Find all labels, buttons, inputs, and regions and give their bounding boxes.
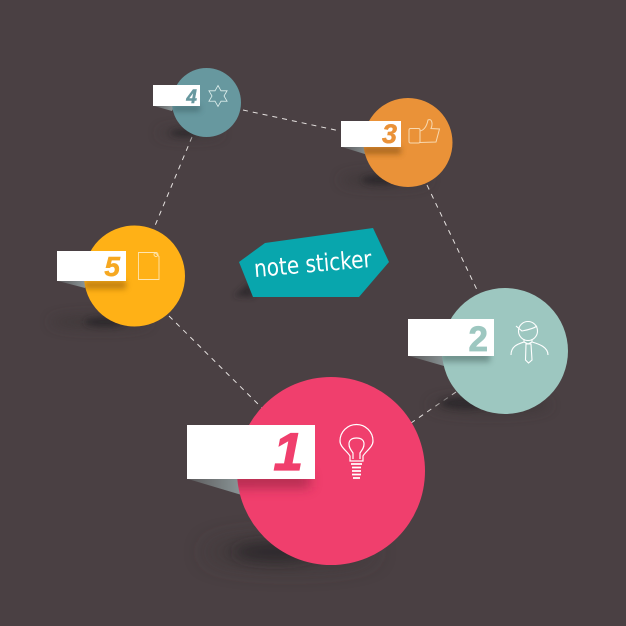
label 2: 2 [469, 320, 488, 359]
label shadow on circle 5 [84, 281, 126, 289]
label tail 4 [154, 106, 174, 111]
label tail 2 [409, 356, 450, 366]
label shadow on circle 1 [225, 474, 310, 487]
label tail 1 [188, 479, 245, 496]
circle 5 [84, 226, 185, 326]
circle 2 [442, 288, 568, 414]
label 2 [408, 319, 494, 359]
sticker shape [239, 228, 389, 297]
label 1 [187, 423, 315, 482]
sticker shadow [234, 282, 254, 297]
sticker text: note sticker [253, 245, 373, 283]
icon: thumbs up [409, 120, 440, 143]
icon: person with tie [511, 322, 548, 363]
label 5: 5 [104, 251, 120, 282]
label shadow on circle 4 [172, 106, 200, 111]
label tail 3 [342, 147, 372, 155]
label tail 5 [58, 281, 88, 288]
circle 1 [237, 377, 425, 565]
ground shadow 5 [50, 315, 150, 329]
label 3: 3 [382, 119, 397, 149]
label 4: 4 [185, 87, 197, 108]
ground shadow 3 [340, 173, 430, 187]
circle 5 group [50, 226, 185, 329]
ground shadow 2 [430, 396, 550, 414]
ground shadow 1 [205, 538, 375, 566]
label shadow on circle 3 [362, 147, 401, 154]
icon: light bulb [340, 425, 373, 478]
circle 4 [172, 68, 241, 137]
dashed connector lines [154, 110, 478, 423]
note sticker [234, 228, 389, 297]
circle 3 group [340, 98, 452, 187]
icon: document [138, 252, 159, 280]
label shadow on circle 2 [440, 352, 490, 362]
ground shadow 4 [158, 128, 222, 138]
label 1: 1 [274, 423, 303, 482]
infographic canvas [57, 68, 568, 570]
circle 4 group [153, 68, 241, 138]
circle 2 group [408, 288, 568, 414]
circle 3 [364, 98, 452, 187]
circle 1 group [187, 377, 425, 566]
icon: star [209, 86, 227, 106]
